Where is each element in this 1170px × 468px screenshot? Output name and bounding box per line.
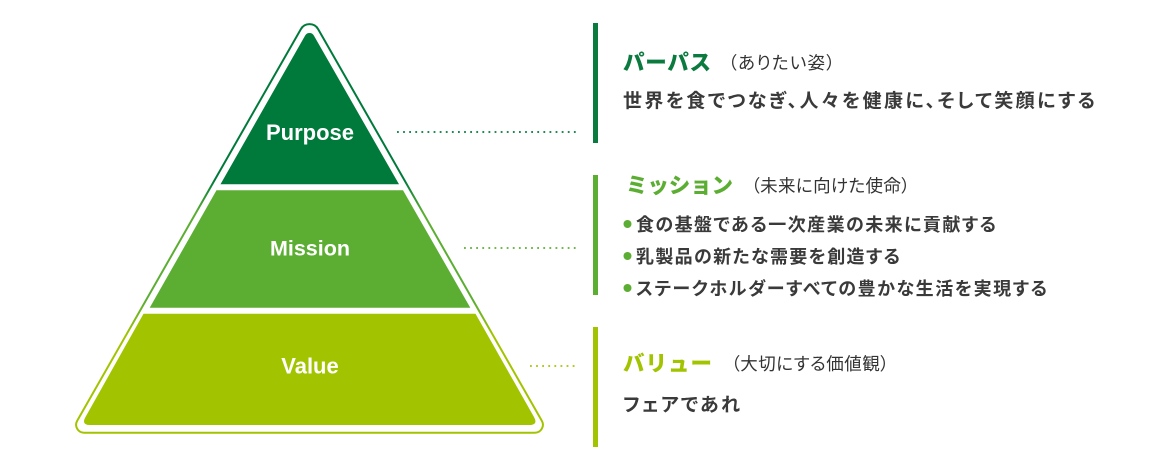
dotted connector: Purpose xyxy=(397,131,577,133)
subheading: mission: （未来に向けた使命） xyxy=(751,176,910,196)
subheading: purpose: （ありたい姿） xyxy=(728,53,835,73)
heading: purpose: パーパス xyxy=(623,51,711,75)
tier: Mission: Mission xyxy=(270,236,350,260)
tier: Value: Value xyxy=(281,354,339,378)
tier: Mission xyxy=(150,190,470,308)
mission list item 1: 食の基盤である一次産業の未来に貢献する xyxy=(636,215,996,235)
panel: mission xyxy=(593,174,1047,299)
tier: Value xyxy=(84,314,535,425)
accent bar: value xyxy=(593,327,598,447)
tier: Purpose: Purpose xyxy=(266,120,354,145)
pyramid outline xyxy=(76,24,543,433)
mission list item 2: 乳製品の新たな需要を創造する xyxy=(636,247,900,267)
accent bar: purpose xyxy=(593,23,598,143)
heading: value: バリュー xyxy=(623,352,712,376)
mission list item 3: ステークホルダーすべての豊かな生活を実現する xyxy=(636,278,1047,299)
tier: Purpose xyxy=(220,33,399,184)
dotted connector: Mission xyxy=(464,247,577,249)
panel: purpose xyxy=(593,23,1095,143)
pyramid diagram xyxy=(76,24,543,433)
panel: value xyxy=(593,327,889,447)
statement: value: フェアであれ xyxy=(623,394,740,416)
heading: mission: ミッション xyxy=(626,174,733,198)
dotted connector: Value xyxy=(530,365,577,367)
subheading: value: （大切にする価値観） xyxy=(731,354,889,374)
accent bar: mission xyxy=(593,175,598,295)
statement: purpose: 世界を食でつなぎ、人々を健康に、そして笑顔にする xyxy=(623,89,1095,112)
